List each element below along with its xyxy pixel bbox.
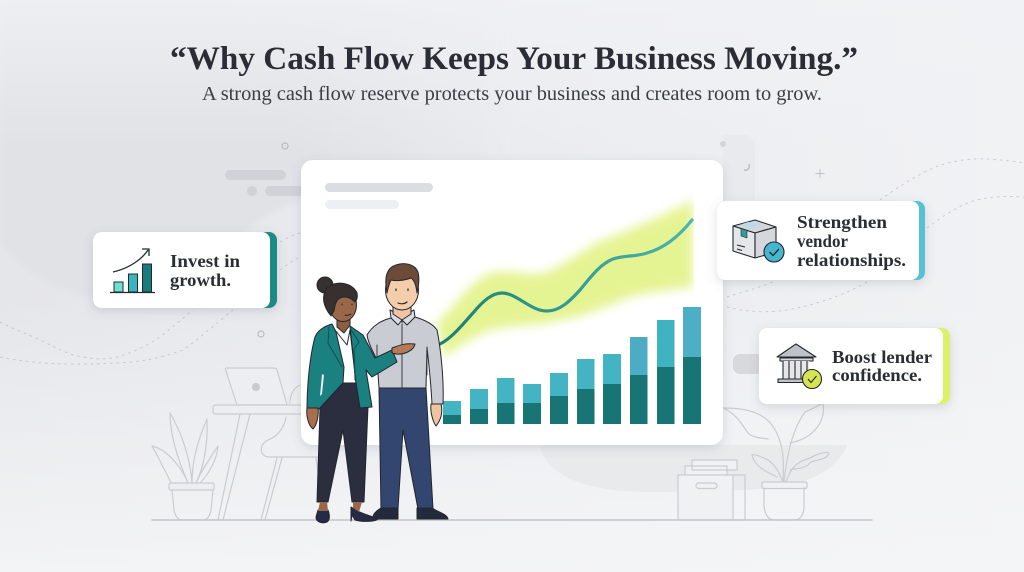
woman neck and head bbox=[337, 315, 350, 333]
man shirt bbox=[367, 317, 443, 404]
title: “Why Cash Flow Keeps Your Business Moving.” bbox=[170, 41, 858, 77]
icon: chair bbox=[261, 385, 325, 520]
bar chart bbox=[443, 307, 701, 424]
man hand bbox=[431, 404, 442, 426]
chart heading placeholder bbox=[325, 183, 433, 209]
office line art: desk, laptop, chair and plant bbox=[152, 368, 872, 520]
man neck and head bbox=[393, 300, 411, 320]
woman trousers bbox=[317, 383, 368, 502]
trend line bbox=[440, 220, 692, 344]
icon: laptop bbox=[226, 368, 287, 405]
icon: left potted plant bbox=[152, 413, 218, 520]
callout text bbox=[797, 212, 906, 270]
icon: desk bbox=[213, 405, 305, 520]
callout: strengthen vendor relationships bbox=[717, 201, 925, 280]
man trousers bbox=[379, 388, 433, 509]
callout text: growth. bbox=[170, 270, 231, 290]
callout text bbox=[170, 251, 240, 290]
callout: invest in growth bbox=[93, 232, 277, 308]
callout text: Invest in bbox=[170, 251, 240, 271]
icon: file box bbox=[678, 460, 745, 520]
chart panel bbox=[301, 160, 723, 445]
callout: boost lender confidence bbox=[759, 328, 950, 404]
woman blazer left panel bbox=[307, 324, 344, 409]
woman bbox=[307, 277, 415, 523]
floor line bbox=[152, 519, 872, 521]
callout text: Strengthen bbox=[797, 212, 887, 232]
icon: rising bars bbox=[110, 249, 155, 292]
icon: right potted plant bbox=[723, 403, 829, 520]
callout text: Boost lender bbox=[832, 347, 932, 367]
icon: package with check bbox=[733, 220, 784, 262]
callout text: vendor bbox=[797, 231, 848, 251]
woman shirt bbox=[335, 330, 356, 383]
woman sleeve gap bbox=[320, 374, 324, 396]
callout text: relationships. bbox=[797, 250, 906, 270]
icon: bank with check bbox=[777, 344, 822, 388]
woman hand gesture bbox=[392, 344, 415, 354]
people bbox=[307, 264, 448, 523]
callout text: confidence. bbox=[832, 365, 922, 385]
area band bbox=[437, 200, 693, 357]
man collar bbox=[390, 310, 415, 325]
subtitle: A strong cash flow reserve protects your business and creates room to grow. bbox=[202, 84, 822, 105]
callout text bbox=[832, 347, 932, 385]
man bbox=[367, 264, 448, 519]
man shoes bbox=[373, 508, 448, 519]
woman blazer right panel and arm bbox=[350, 326, 397, 408]
woman shoes bbox=[316, 510, 329, 523]
